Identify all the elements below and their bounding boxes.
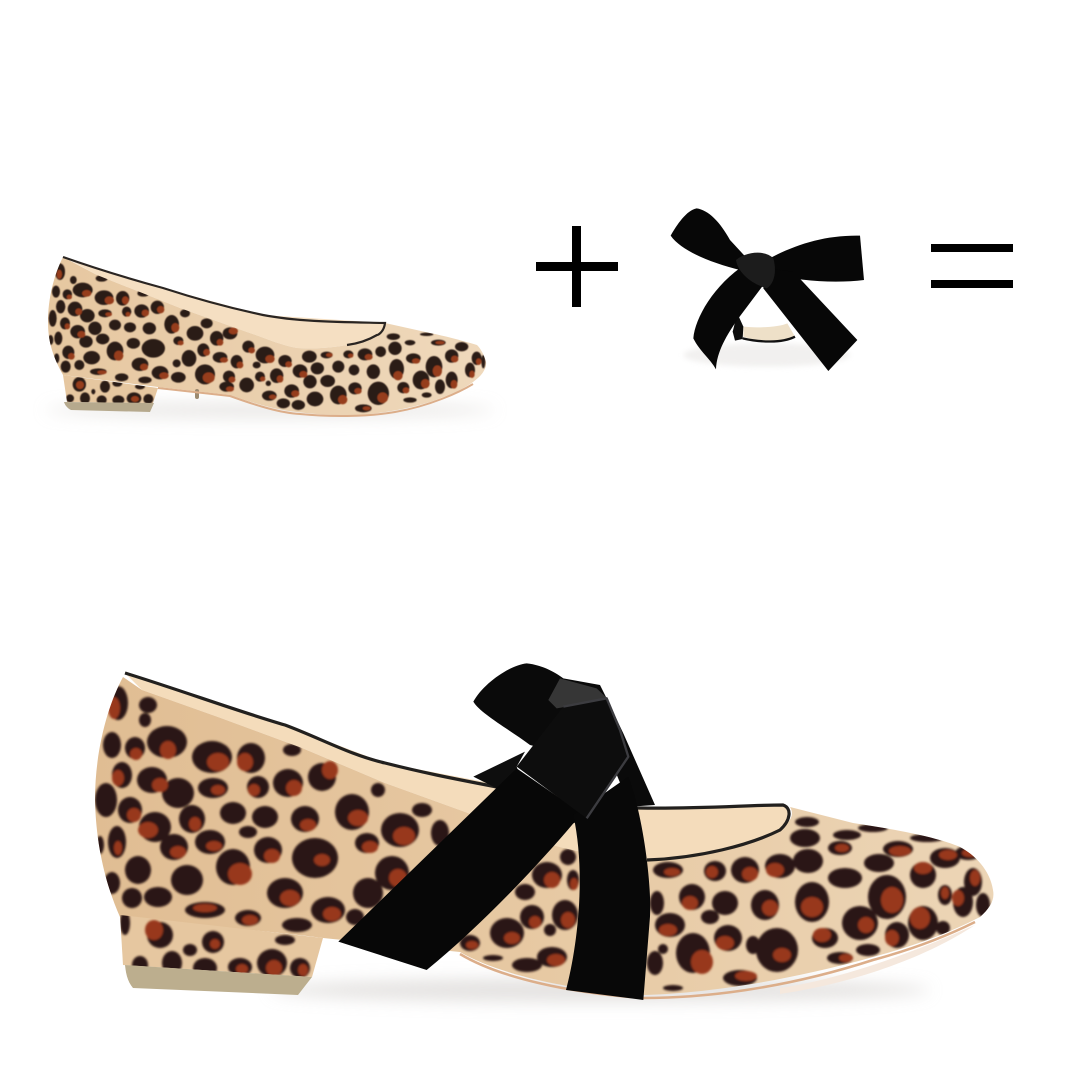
large heel base	[125, 965, 312, 995]
large shoe insole	[125, 673, 789, 860]
big bow fold edge	[563, 698, 628, 818]
big bow down strap	[566, 777, 650, 1000]
bow right loop	[763, 236, 864, 282]
small shoe upper	[48, 257, 486, 415]
large toe reflection	[780, 925, 975, 994]
large shoe upper	[95, 677, 993, 995]
small shoe heel block	[63, 375, 158, 403]
big bow long strap	[338, 768, 587, 970]
big bow front fold	[517, 698, 628, 818]
bow shadow	[683, 343, 850, 367]
infographic canvas	[48, 208, 1013, 1007]
plus sign	[536, 226, 618, 307]
big bow back loop	[473, 663, 655, 807]
large heel block	[120, 915, 323, 977]
small heel base	[64, 402, 154, 412]
equals sign	[931, 244, 1013, 288]
small shoe shadow	[45, 402, 495, 418]
small shoe pull tab	[195, 389, 199, 399]
small leopard flat shoe	[45, 257, 495, 418]
small shoe spots	[48, 263, 485, 412]
small shoe sole line	[158, 384, 473, 416]
bow left tail	[693, 263, 763, 369]
small shoe insole	[66, 258, 385, 348]
large shoe sole	[460, 922, 975, 998]
large shoe top binding	[125, 673, 789, 860]
large heel spots	[120, 911, 310, 978]
bow left loop	[671, 208, 750, 270]
bow knot	[736, 253, 775, 288]
small heel spots	[66, 377, 153, 405]
big bow satin fold	[548, 678, 608, 708]
bow black back strap	[733, 313, 743, 341]
large shoe spots	[95, 686, 990, 991]
bow right tail	[763, 268, 857, 371]
large leopard shoe with bow	[95, 663, 993, 1002]
big bow band behind shoe	[473, 752, 525, 790]
large shoe shadow	[270, 978, 930, 1002]
small velvet bow	[671, 208, 864, 371]
bow cream insole strap	[743, 323, 795, 341]
small shoe top binding	[63, 257, 385, 345]
large velvet bow	[338, 663, 655, 1000]
